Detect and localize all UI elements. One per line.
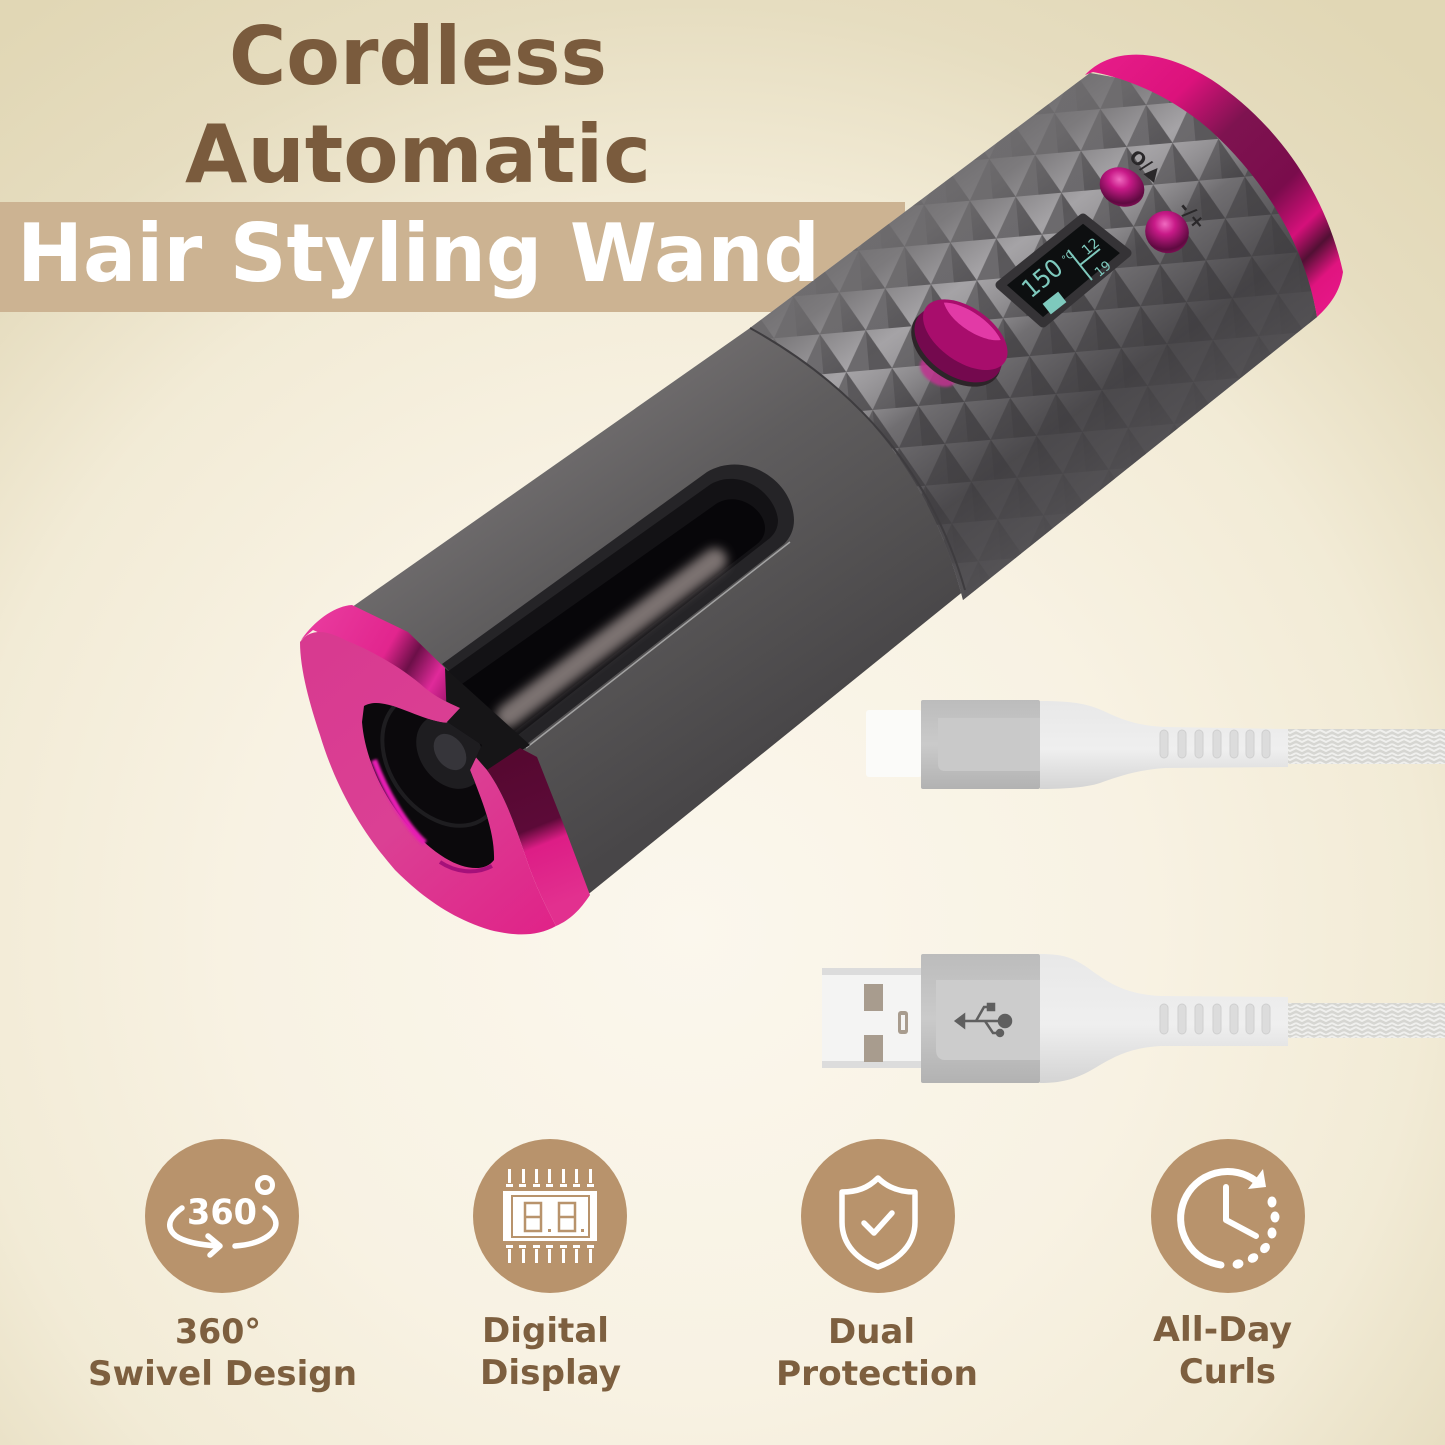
wand textured grip <box>750 73 1317 600</box>
label: dual protection <box>776 1312 978 1394</box>
plus minus button <box>1138 204 1196 260</box>
cap end face <box>300 632 556 934</box>
wand top pink ring <box>1085 55 1343 317</box>
USB-A metal housing <box>921 954 1040 1083</box>
icon: clock <box>1151 1139 1305 1293</box>
icon: digital display <box>473 1139 627 1293</box>
label: all-day curls <box>1153 1310 1292 1392</box>
wand barrel <box>345 328 965 905</box>
USB-A boot <box>1040 954 1288 1083</box>
label: 360 swivel: Swivel Design <box>88 1354 357 1394</box>
title line: Hair Styling Wand: Hair Styling Wand <box>17 207 820 300</box>
curling chamber neck <box>445 668 530 772</box>
USB-A braided cord <box>1288 1003 1445 1038</box>
button glow <box>915 351 961 393</box>
plus minus label: -/+ <box>1174 197 1210 235</box>
label: digital display <box>480 1311 621 1393</box>
timer reading: 12 <box>1079 235 1103 259</box>
USB trident symbol <box>956 1004 1011 1036</box>
USB-C grip notches <box>1160 730 1270 758</box>
USB-A cable <box>822 954 1445 1083</box>
wand hair slot <box>442 465 794 748</box>
cap side wall top <box>301 605 462 708</box>
title line: Automatic: Automatic <box>185 108 651 201</box>
USB-C cable <box>866 700 1445 789</box>
unit: °C <box>1060 249 1076 265</box>
label: all-day curls: All-Day <box>1153 1310 1292 1350</box>
USB-C metal housing <box>921 700 1040 789</box>
icon: 360 swivel: 360 <box>187 1193 257 1233</box>
LCD divider and battery icon <box>1044 249 1100 313</box>
mode button <box>1093 160 1151 214</box>
title <box>17 10 820 300</box>
cap side wall bottom <box>487 748 590 926</box>
label: dual protection: Protection <box>776 1354 978 1394</box>
LCD display <box>1000 218 1127 323</box>
label: 360 swivel: 360° <box>175 1312 261 1352</box>
feature: digital display <box>473 1139 627 1393</box>
temperature reading: 150 <box>1016 253 1068 304</box>
title line: Cordless: Cordless <box>229 10 607 103</box>
wand seam <box>750 328 965 590</box>
curling chamber opening <box>362 703 494 874</box>
label: digital display: Display <box>480 1353 621 1393</box>
feature: 360 swivel <box>88 1139 357 1394</box>
title band <box>0 202 905 312</box>
label: dual protection: Dual <box>828 1312 915 1352</box>
mode button label: O/▲ <box>1125 146 1166 185</box>
feature: dual protection <box>776 1139 978 1394</box>
product: hair styling wand <box>300 55 1343 934</box>
feature: all-day curls <box>1151 1139 1305 1392</box>
USB-C boot <box>1040 701 1288 789</box>
USB-A grip notches <box>1160 1004 1270 1034</box>
icon: shield <box>801 1139 955 1293</box>
USB-A plug <box>822 968 922 1068</box>
power slider button <box>897 284 1022 403</box>
icon: 360 swivel <box>145 1139 299 1293</box>
curl count: 19 <box>1092 258 1114 280</box>
label: all-day curls: Curls <box>1179 1352 1276 1392</box>
label: digital display: Digital <box>482 1311 609 1351</box>
USB-C braided cord <box>1288 729 1445 764</box>
label: 360 swivel <box>88 1312 357 1394</box>
USB-C plug tip <box>866 710 922 777</box>
